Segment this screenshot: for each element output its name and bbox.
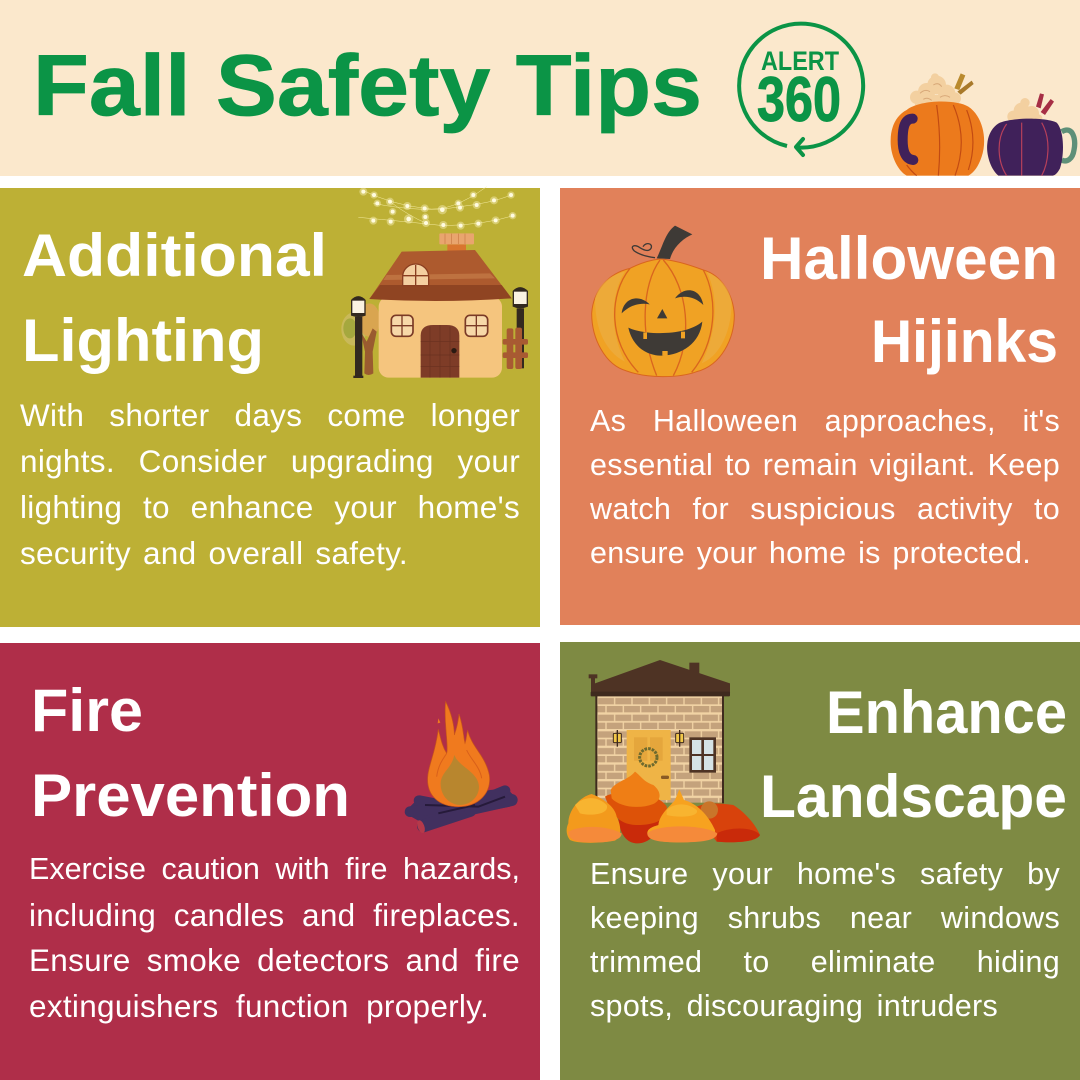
icon: house with string lights xyxy=(341,186,528,378)
heading: Fire Prevention xyxy=(31,677,350,829)
panel: halloween hijinks: ensure your home is protected. xyxy=(590,536,1031,570)
logo: Alert 360 xyxy=(737,22,866,158)
panel: additional lighting: security and overall safety. xyxy=(20,535,408,571)
heading: Additional Lighting xyxy=(22,222,327,374)
heading: Enhance Landscape: Enhance xyxy=(826,679,1067,746)
panel: halloween hijinks: essential to remain vigilant. Keep xyxy=(590,448,1060,482)
body text: landscape xyxy=(590,857,1060,1023)
panel: fire prevention: including candles and fireplaces. xyxy=(29,897,520,933)
icon: jack-o-lantern xyxy=(591,226,735,378)
panel: fire prevention: Exercise caution with fire hazards, xyxy=(29,852,520,886)
heading: Additional Lighting: Lighting xyxy=(22,307,264,374)
icon: pumpkin mugs xyxy=(890,73,1078,176)
panel: enhance landscape: spots, discouraging intruders xyxy=(590,989,998,1023)
panel: halloween hijinks: As Halloween approaches, it's xyxy=(590,404,1060,438)
heading: Fire Prevention: Fire xyxy=(31,677,143,744)
panel: enhance landscape: Ensure your home's safety by xyxy=(590,857,1060,891)
heading: Additional Lighting: Additional xyxy=(22,222,327,289)
heading: Enhance Landscape: Landscape xyxy=(760,763,1067,830)
heading: Fire Prevention: Prevention xyxy=(31,762,350,829)
panel: enhance landscape: keeping shrubs near windows xyxy=(590,901,1060,935)
panel: additional lighting xyxy=(0,188,540,627)
heading: Halloween Hijinks xyxy=(760,225,1058,375)
logo: Alert 360: ALERT xyxy=(761,46,839,76)
panel: fire prevention: Ensure smoke detectors and fire xyxy=(29,942,520,978)
header band xyxy=(0,0,1080,176)
panel: halloween hijinks xyxy=(560,188,1080,625)
heading: Enhance Landscape xyxy=(760,679,1067,830)
panel: additional lighting: lighting to enhance your home's xyxy=(20,489,520,525)
body text: halloween xyxy=(590,404,1060,570)
panel: enhance landscape xyxy=(560,642,1080,1080)
body text: lighting xyxy=(20,397,520,571)
heading: Halloween Hijinks: Hijinks xyxy=(871,308,1058,375)
panel: additional lighting: With shorter days come longer xyxy=(20,397,520,433)
panel: halloween hijinks: watch for suspicious activity to xyxy=(590,492,1060,526)
icon: brick house with autumn shrubs xyxy=(566,660,760,844)
panel: fire prevention: extinguishers function properly. xyxy=(29,988,489,1024)
panel: enhance landscape: trimmed to eliminate hiding xyxy=(590,945,1060,979)
heading: Halloween Hijinks: Halloween xyxy=(760,225,1058,292)
logo: Alert 360: 360 xyxy=(757,65,841,135)
icon: campfire xyxy=(404,700,518,833)
body text: fire xyxy=(29,852,520,1024)
panel: additional lighting: nights. Consider upgrading your xyxy=(20,443,520,479)
panel: fire prevention xyxy=(0,643,540,1080)
title: Fall Safety Tips xyxy=(33,38,702,134)
